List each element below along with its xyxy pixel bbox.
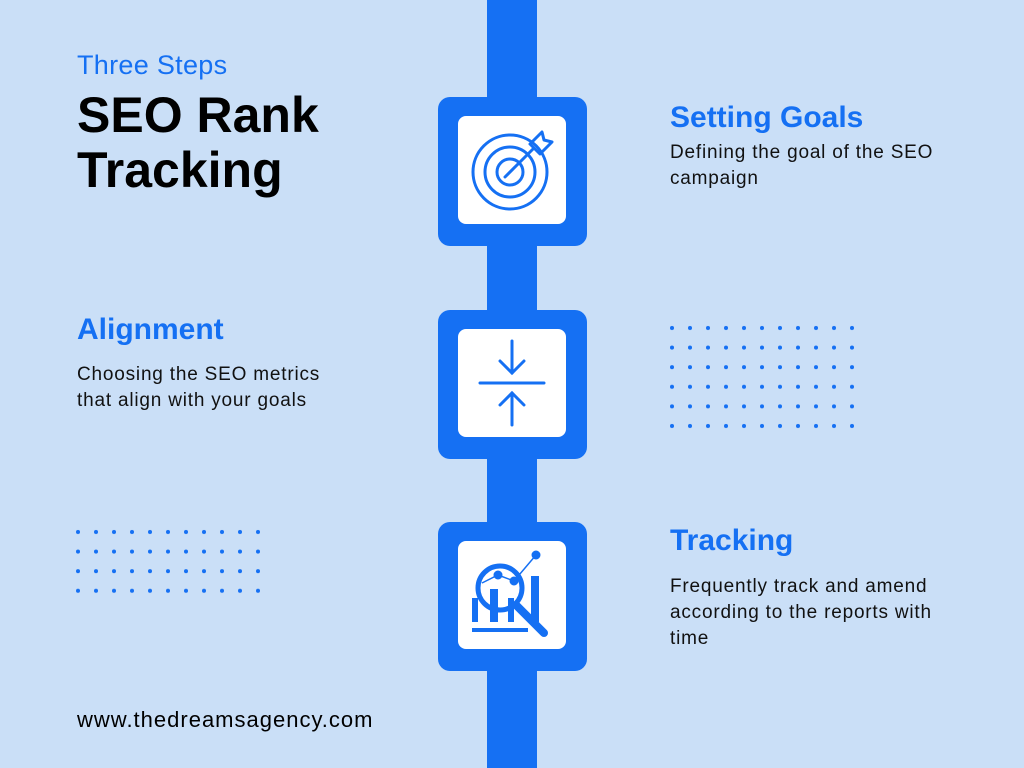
website url: www.thedreamsagency.com xyxy=(77,707,374,732)
step 2 heading: Alignment xyxy=(77,313,224,346)
step 1 text: Defining the goal of the SEO campaign xyxy=(670,142,933,189)
step 2 text: that align with your goals xyxy=(77,390,307,411)
vertical timeline bar xyxy=(487,0,537,768)
title: Tracking xyxy=(77,142,283,198)
step 1 icon box: target xyxy=(438,97,587,246)
step 2 icon box: align arrows xyxy=(438,310,587,459)
step 3 heading: Tracking xyxy=(670,524,793,557)
step 3 icon box: analytics magnifier xyxy=(438,522,587,671)
subtitle: Three Steps xyxy=(77,50,227,80)
dot pattern right xyxy=(670,326,854,428)
step 2 text xyxy=(77,364,320,411)
step 3 text: Frequently track and amend according to the reports with time xyxy=(670,576,932,649)
step 2 text: Choosing the SEO metrics xyxy=(77,364,320,385)
title xyxy=(77,87,319,198)
step 1 heading: Setting Goals xyxy=(670,101,863,134)
dot pattern left xyxy=(76,530,260,594)
title: SEO Rank xyxy=(77,87,319,143)
